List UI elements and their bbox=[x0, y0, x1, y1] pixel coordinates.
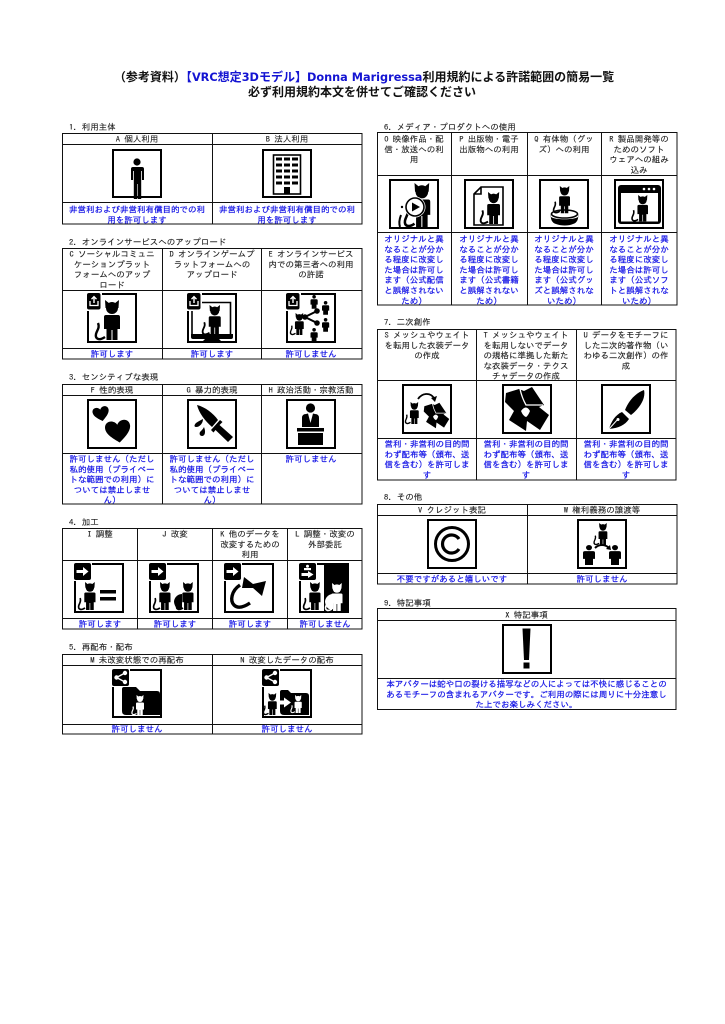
answer O: ため） bbox=[401, 297, 427, 306]
header row 7: した二次的著作物（い bbox=[584, 341, 668, 350]
answer G: 私的使用（プライベー bbox=[170, 464, 254, 474]
answer row 2: 許可します bbox=[191, 349, 233, 359]
panel: 1 利用主体 bbox=[62, 122, 362, 225]
answer row 7: 営利・非営利の目的問 bbox=[484, 441, 568, 449]
answer row 5: 許可しません bbox=[262, 724, 312, 734]
table frame 4 bbox=[62, 528, 362, 629]
header row 3: H 政治活動・宗教活動 bbox=[268, 385, 354, 395]
header row 3: G 暴力的表現 bbox=[186, 386, 238, 395]
icon: transfer of rights bbox=[578, 520, 626, 568]
header row 4: I 調整 bbox=[87, 529, 113, 539]
answer row 4 bbox=[79, 619, 350, 629]
header row 6: ためのソフト bbox=[614, 145, 664, 154]
icon: figure goods bbox=[540, 180, 588, 228]
answer A: 非営利および非営利有償目的での利 bbox=[69, 206, 205, 214]
icon: video bbox=[390, 180, 438, 228]
icon: distribute modified bbox=[261, 668, 311, 717]
icon: copyright bbox=[428, 520, 476, 568]
answer row 2: 許可します bbox=[91, 349, 133, 359]
title bbox=[114, 69, 614, 99]
header E: の許諾 bbox=[298, 270, 324, 280]
panel: 8 その他 bbox=[378, 493, 677, 584]
answer row 7: 信を含む）を許可しま bbox=[584, 460, 668, 470]
header C: ロード bbox=[99, 281, 125, 290]
header row 7: T メッシュやウェイト bbox=[484, 332, 568, 340]
answer A: 用を許可します bbox=[107, 215, 167, 225]
header row 6: Q 有体物（グッ bbox=[534, 136, 594, 144]
header row 3 bbox=[91, 385, 354, 395]
header E: 内での第三者への利用 bbox=[268, 259, 354, 269]
answer G: 許可しません（ただし bbox=[170, 456, 254, 464]
icon: adjust bbox=[73, 562, 123, 612]
answer G: ついては禁止しませ bbox=[174, 486, 250, 495]
header row 8: V クレジット表記 bbox=[418, 505, 486, 515]
icon: hearts bbox=[88, 400, 136, 448]
panel: 3 センシティブな表現 bbox=[62, 372, 362, 505]
answer row 2 bbox=[91, 349, 336, 359]
header row 7: チャデータの作成 bbox=[492, 371, 560, 381]
header row 6: ズ）への利用 bbox=[538, 144, 590, 154]
answer row 8: 不要ですがあると嬉しいです bbox=[397, 574, 507, 584]
header row 1 bbox=[116, 134, 308, 144]
header row 4 bbox=[87, 529, 355, 560]
answer Q: なることが分か bbox=[534, 244, 594, 254]
answer G: トな範囲での利用）に bbox=[170, 475, 254, 485]
answer X: 本アバターは蛇や口の裂ける描写などの人によっては不快に感じることの bbox=[386, 681, 667, 689]
answer row 7: 営利・非営利の目的問 bbox=[584, 441, 668, 449]
header row 6: ウェアへの組み bbox=[609, 155, 669, 165]
icon: reuse mesh bbox=[403, 385, 451, 433]
answer row 7: 営利・非営利の目的問 bbox=[384, 441, 470, 449]
answer row 7: わず配布等（頒布、送 bbox=[384, 449, 470, 459]
answer F: ん） bbox=[104, 496, 120, 505]
header row 4: 利用 bbox=[242, 550, 258, 560]
icon: other data bbox=[223, 562, 273, 612]
answer row 7: 信を含む）を許可しま bbox=[384, 460, 470, 470]
panel: 5 再配布・配布 bbox=[62, 643, 362, 734]
panel: 9 特記事項 bbox=[378, 599, 676, 710]
answer H: 許可しません bbox=[286, 454, 336, 464]
table frame 5 bbox=[62, 654, 362, 734]
header row 4: K 他のデータを bbox=[220, 531, 280, 539]
icon: outsourcing bbox=[298, 562, 348, 612]
answer row 4: 許可しません bbox=[300, 619, 350, 629]
header row 4: L 調整・改変の bbox=[295, 531, 355, 539]
header row 5: N 改変したデータの配布 bbox=[240, 655, 334, 665]
header D: ラットフォームへの bbox=[174, 260, 250, 269]
answer row 7: 信を含む）を許可しま bbox=[484, 460, 568, 470]
answer R: た場合は許可し bbox=[609, 265, 669, 275]
answer row 5 bbox=[112, 724, 312, 734]
header E: E オンラインサービス bbox=[268, 251, 354, 259]
answer row 8: 許可しません bbox=[576, 574, 628, 584]
header C: フォームへのアップ bbox=[74, 270, 151, 280]
table frame 3 bbox=[62, 384, 362, 504]
panel: 6 メディア bbox=[378, 122, 677, 306]
header row 5: M 未改変状態での再配布 bbox=[90, 655, 184, 665]
answer F: ついては禁止しませ bbox=[74, 486, 150, 495]
heading: 2: 2. オンラインサービスへのアップロード bbox=[69, 237, 226, 247]
answer O: オリジナルと異 bbox=[384, 236, 444, 244]
heading: 9: 9. 特記事項 bbox=[384, 599, 431, 608]
header row 4: J 改変 bbox=[162, 529, 188, 539]
title: 必ず利用規約本文を併せてご確認ください bbox=[248, 84, 476, 99]
heading: 4: 4. 加工 bbox=[69, 518, 99, 527]
header row 6: O 映像作品・配 bbox=[384, 136, 444, 144]
header row 6: 込み bbox=[630, 165, 648, 175]
answer row 7: す bbox=[522, 471, 530, 480]
heading: 3: 3. センシティブな表現 bbox=[69, 372, 158, 382]
title: （参考資料）【VRC想定3Dモデル】Donna Marigressa利用規約による許諾範囲の簡易一覧 bbox=[114, 69, 614, 84]
header row 7: の規格に準拠した新た bbox=[484, 351, 568, 361]
table frame 2 bbox=[62, 248, 362, 359]
answer Q: る程度に改変し bbox=[534, 255, 594, 265]
answer R: なることが分か bbox=[609, 244, 669, 254]
answer F: トな範囲での利用）に bbox=[70, 475, 154, 485]
answer P: た場合は許可し bbox=[459, 265, 519, 275]
icon: game upload bbox=[186, 292, 236, 342]
header row 6: P 出版物・電子 bbox=[459, 136, 519, 144]
header row 6 bbox=[384, 134, 669, 175]
answer Q: ます（公式グッ bbox=[534, 275, 594, 285]
answer row 7: す bbox=[622, 471, 630, 480]
table frame 8 bbox=[378, 504, 677, 584]
header row 9: X 特記事項 bbox=[505, 611, 548, 620]
table frame 1 bbox=[62, 134, 362, 224]
answer row 4: 許可します bbox=[79, 619, 121, 629]
header row 1: A 個人利用 bbox=[116, 134, 158, 144]
table frame 9 bbox=[378, 608, 676, 710]
icon: new costume bbox=[503, 385, 551, 433]
header row 8 bbox=[418, 505, 641, 515]
icon: knife bbox=[188, 400, 236, 448]
answer R: いため） bbox=[622, 297, 656, 306]
heading: 6: 6. メディア・プロダクトへの使用 bbox=[384, 122, 516, 132]
header row 7: を転用しないでデータ bbox=[484, 340, 568, 350]
answer B: 用を許可します bbox=[257, 215, 317, 225]
answer row 7: わず配布等（頒布、送 bbox=[584, 449, 668, 459]
icon: pen nib bbox=[602, 385, 650, 433]
answer R: る程度に改変し bbox=[609, 255, 669, 265]
table frame 7 bbox=[378, 330, 676, 480]
header C: ケーションプラット bbox=[74, 259, 150, 269]
heading: 1: 1. 利用主体 bbox=[69, 122, 116, 132]
answer P: ます（公式書籍 bbox=[459, 275, 519, 285]
header row 7: U データをモチーフに bbox=[584, 332, 668, 340]
icon: publication bbox=[465, 180, 513, 228]
heading: 5: 5. 再配布・配布 bbox=[69, 643, 133, 652]
answer row 7 bbox=[384, 439, 668, 480]
header row 7: の作成 bbox=[414, 352, 440, 361]
heading: 8: 8. その他 bbox=[384, 493, 423, 502]
header row 6: 用 bbox=[410, 156, 418, 165]
header row 7 bbox=[384, 330, 668, 381]
answer row 2: 許可しません bbox=[286, 349, 336, 359]
icon: speaker at podium bbox=[287, 400, 335, 448]
icon: modify bbox=[148, 562, 198, 612]
header row 6: 信・放送への利 bbox=[384, 144, 444, 154]
answer O: ます（公式配信 bbox=[384, 275, 444, 285]
answer O: と誤解されない bbox=[384, 286, 444, 296]
header row 7: を転用した衣装データ bbox=[384, 340, 470, 350]
header row 5 bbox=[90, 655, 334, 665]
header row 7: 成 bbox=[622, 362, 631, 371]
icon: social upload bbox=[86, 292, 136, 342]
answer R: トと誤解されな bbox=[609, 286, 669, 296]
header row 6: R 製品開発等の bbox=[609, 136, 669, 144]
header row 4: 外部委託 bbox=[308, 539, 342, 549]
answer row 4: 許可します bbox=[154, 619, 196, 629]
header C: C ソーシャルコミュニ bbox=[70, 251, 154, 259]
answer O: る程度に改変し bbox=[384, 255, 444, 265]
answer F: 許可しません（ただし bbox=[70, 456, 154, 464]
answer Q: オリジナルと異 bbox=[534, 236, 594, 244]
panel: 2 アップロード bbox=[62, 237, 362, 359]
answer P: と誤解されない bbox=[459, 286, 519, 296]
header row 3: F 性的表現 bbox=[91, 386, 133, 395]
answer O: た場合は許可し bbox=[384, 265, 444, 275]
panel: 7 二次創作 bbox=[378, 317, 676, 480]
panel: 4 加工 bbox=[62, 518, 362, 629]
answer F: 私的使用（プライベー bbox=[70, 464, 154, 474]
answer X: あるモチーフの含まれるアバターです。ご利用の際には周りに十分注意し bbox=[386, 689, 667, 699]
icon: person bbox=[113, 150, 161, 199]
icon: redistribute bbox=[111, 668, 161, 717]
icon: exclamation bbox=[503, 625, 551, 673]
heading: 7: 7. 二次創作 bbox=[384, 317, 431, 327]
icon: building bbox=[263, 150, 311, 197]
header row 4: 改変するための bbox=[220, 539, 280, 549]
answer row 4: 許可します bbox=[229, 619, 271, 629]
answer O: なることが分か bbox=[384, 244, 444, 254]
answer Q: ズと誤解されな bbox=[534, 286, 594, 296]
answer X: た上でお楽しみください。 bbox=[476, 700, 578, 710]
header row 1: B 法人利用 bbox=[266, 134, 308, 144]
answer row 5: 許可しません bbox=[112, 724, 162, 734]
answer Q: いため） bbox=[547, 297, 581, 306]
icon: third-party use bbox=[285, 292, 335, 342]
header row 7: な衣装データ・テクス bbox=[484, 361, 568, 371]
answer P: る程度に改変し bbox=[459, 255, 519, 265]
answer R: オリジナルと異 bbox=[609, 236, 669, 244]
header D: アップロード bbox=[186, 270, 238, 280]
answer P: オリジナルと異 bbox=[459, 236, 519, 244]
answer B: 非営利および非営利有償目的での利 bbox=[219, 206, 355, 214]
header row 8: W 権利義務の譲渡等 bbox=[564, 505, 641, 515]
table frame 6 bbox=[378, 132, 677, 305]
header D: D オンラインゲームプ bbox=[170, 251, 254, 259]
answer row 7: す bbox=[423, 471, 431, 480]
icon: software bbox=[615, 180, 663, 228]
header row 6: 出版物への利用 bbox=[459, 144, 519, 154]
answer P: なることが分か bbox=[459, 244, 519, 254]
answer R: ます（公式ソフ bbox=[609, 276, 669, 285]
answer P: ため） bbox=[476, 297, 502, 306]
answer Q: た場合は許可し bbox=[534, 265, 594, 275]
header row 7: S メッシュやウェイト bbox=[384, 332, 470, 340]
header row 7: わゆる二次創作）の作 bbox=[584, 351, 668, 361]
answer row 8 bbox=[397, 574, 628, 584]
answer G: ん） bbox=[204, 496, 220, 505]
answer row 7: わず配布等（頒布、送 bbox=[484, 449, 568, 459]
